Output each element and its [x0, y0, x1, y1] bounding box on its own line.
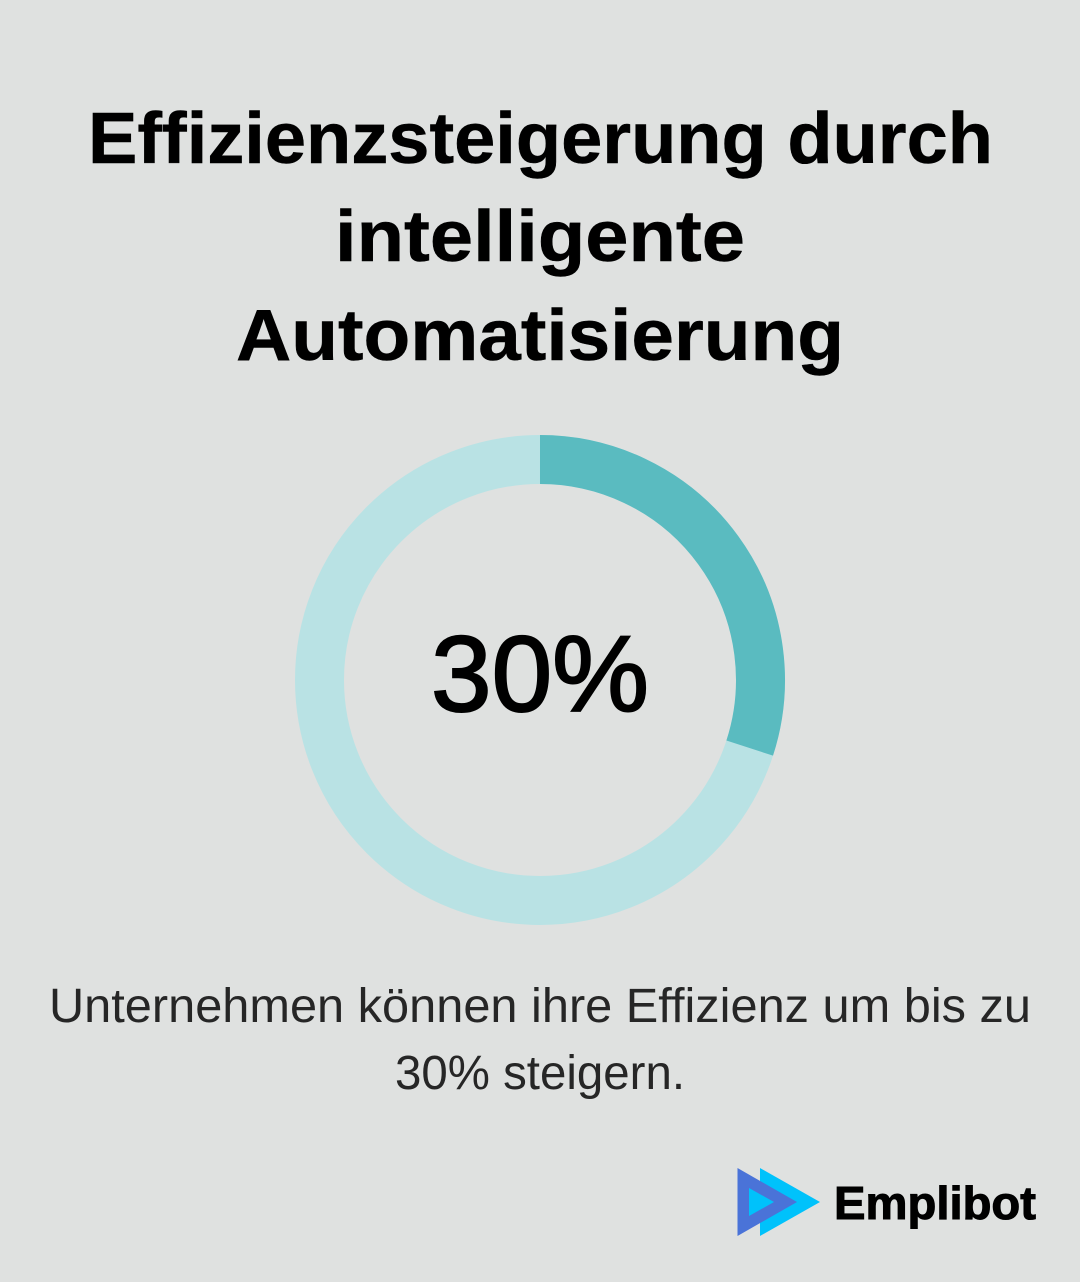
- title: intelligente: [335, 197, 745, 277]
- description: [49, 980, 1031, 1100]
- title: Effizienzsteigerung durch: [88, 99, 993, 179]
- icon: play triangles: [738, 1168, 820, 1236]
- description: Unternehmen können ihre Effizienz um bis zu: [49, 980, 1031, 1033]
- description: 30% steigern.: [395, 1047, 685, 1100]
- title: Automatisierung: [236, 296, 844, 376]
- brand name: Emplibot: [834, 1177, 1036, 1229]
- title: [88, 99, 993, 376]
- logo: Emplibot: [738, 1168, 1036, 1236]
- donut chart: 30%: [320, 460, 760, 900]
- donut value: 30%: [431, 613, 649, 734]
